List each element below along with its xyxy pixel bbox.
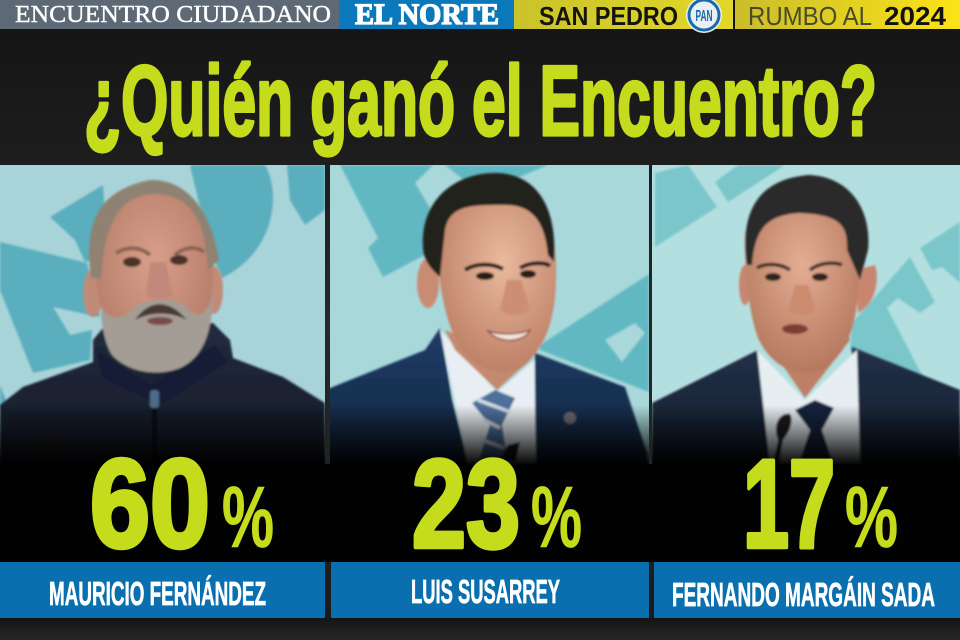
name bar: Fernando Margáin Sada [654,562,960,618]
backdrop shapes [655,165,960,377]
header: San Pedro: SAN PEDRO [539,1,678,31]
bottom strip [0,618,960,640]
backdrop shapes [0,165,325,410]
backdrop letter cutout [605,323,645,362]
panel: Fernando Margáin Sada photo [652,165,960,470]
result: 60%: 60 [90,435,210,574]
name bar: Luis Susarrey [331,562,649,618]
icon: PAN party logo [686,0,722,33]
name bar: Mauricio Fernández: MAURICIO FERNÁNDEZ [49,575,266,612]
result: 23%: % [531,470,582,566]
name bar: Luis Susarrey: LUIS SUSARREY [411,573,560,610]
header bar [0,0,960,33]
result: 17%: % [845,470,898,566]
person: Luis Susarrey [325,173,647,470]
black results band [0,464,960,562]
result: 60%: % [222,470,274,566]
panel: Mauricio Fernández photo [0,165,325,470]
person: Mauricio Fernández [0,180,325,470]
header: Rumbo al 2024: 2024 [884,1,947,31]
backdrop shapes [340,165,649,392]
icon: PAN party logo: PAN [696,8,712,25]
header: Rumbo al 2024: RUMBO AL [748,1,872,31]
result: 17%: 17 [743,435,835,574]
header: Rumbo al 2024 [735,0,960,31]
result: 23%: 23 [412,435,520,574]
header: San Pedro [514,0,733,31]
name bar: Mauricio Fernández [0,562,325,618]
header: Encuentro Ciudadano: ENCUENTRO CIUDADANO [15,2,331,28]
panel: Luis Susarrey photo [325,165,649,470]
person: Fernando Margáin Sada [652,175,960,470]
